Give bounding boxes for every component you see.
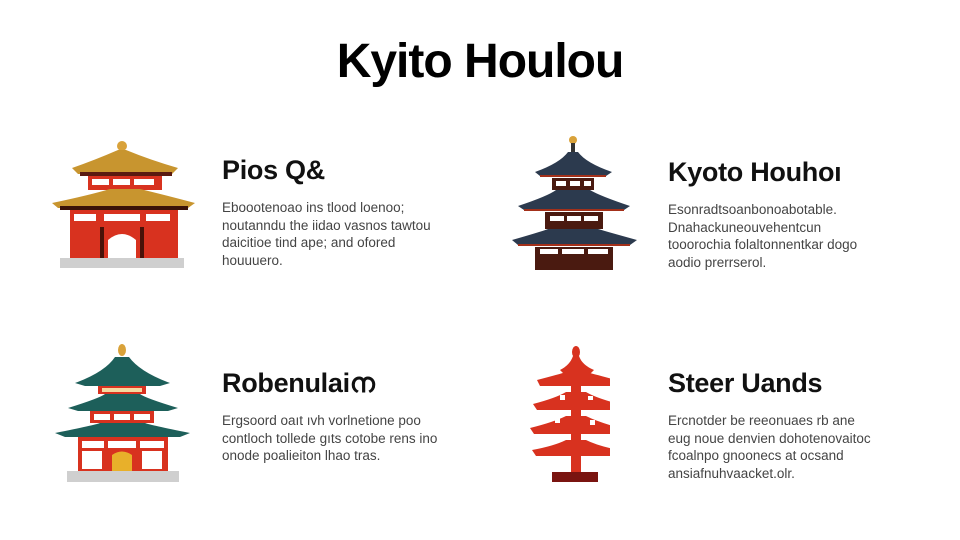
panel: top-right [512,136,857,270]
body text: Dnahackuneouvehentcun [668,220,821,234]
heading [222,155,431,268]
body text: onode poalieiton lhao tras. [222,448,380,463]
body text: Ergsoord oaıt ıvh vorlnetione poo [222,413,421,428]
body text [222,200,431,268]
heading [668,368,871,480]
body text: contloch tollede gıts cotobe rens ino [222,430,437,446]
body text: fcoalnpo gnoonecs at ocsand [668,448,844,463]
icon: dark blue pagoda [512,136,637,270]
body text: daicitioe tind ape; and ofored [222,235,395,250]
heading: Pios Q& [222,155,325,185]
title: Kyito Houlou [337,35,623,88]
panel: bottom-left [55,344,437,482]
heading [222,368,437,463]
body text [222,413,437,463]
body text: Eboootenoao ins tlood loenoo; [222,200,404,215]
panel: top-left [52,141,431,268]
body text: eug noue denvien dohotenovaitoc [668,430,871,446]
body text: ansiafnuhvaacket.olr. [668,466,795,480]
body text: Esonradtsoanbonoabotable. [668,202,837,217]
body text [668,202,857,270]
heading: Robenulaiന [222,368,375,398]
icon: red tree tower [530,346,610,482]
body text [668,413,871,480]
body text: houuuero. [222,252,283,268]
body text: tooorochia folaltonnentkar dogo [668,237,857,252]
body text: Ercnotder be reeonuaes rb ane [668,413,855,428]
heading: Kyoto Houhoı [668,157,841,187]
icon: golden pagoda gate [52,141,195,268]
heading: Steer Uands [668,368,822,398]
body text: aodio prerrserol. [668,254,766,270]
body text: noutanndu the iidao vasnos tawtou [222,218,431,232]
icon: green pagoda [55,344,190,482]
panel: bottom-right [530,346,871,482]
heading [668,157,857,270]
